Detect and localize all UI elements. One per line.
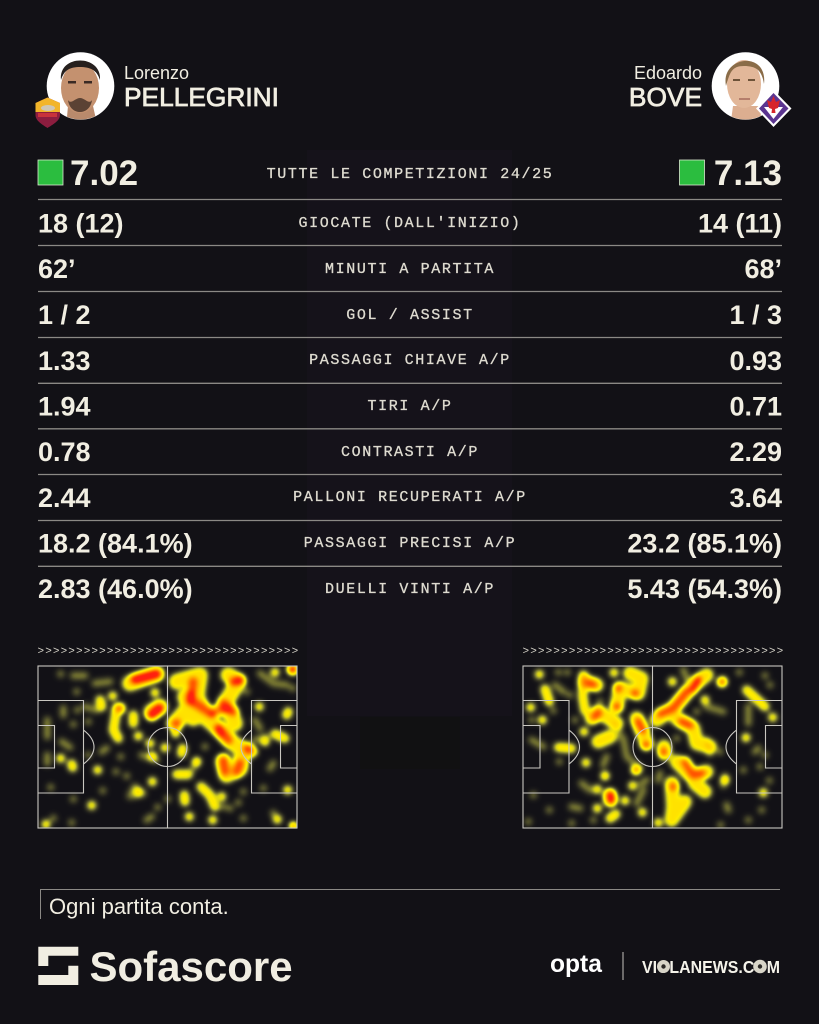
name: Lorenzo Pellegrini: PELLEGRINI [124, 82, 279, 112]
row: goals assists: 1 / 2 [38, 300, 91, 330]
icon: green rating square left [38, 160, 63, 185]
row: appearances: GIOCATE (DALL'INIZIO) [298, 215, 522, 232]
icon: Fiorentina crest [756, 90, 792, 127]
photo: Lorenzo Pellegrini [47, 52, 114, 128]
row: key passes: 0.93 [729, 346, 782, 376]
row: shots: 0.71 [729, 392, 782, 422]
row: accurate passes: 23.2 (85.1%) [627, 528, 782, 558]
row: minutes: MINUTI A PARTITA [325, 261, 495, 278]
row: appearances: 18 (12) [38, 208, 124, 238]
row: accurate passes: PASSAGGI PRECISI A/P [304, 535, 516, 552]
row: recoveries: 2.44 [38, 483, 91, 513]
row: goals assists: 1 / 3 [729, 300, 782, 330]
row: accurate passes: 18.2 (84.1%) [38, 528, 193, 558]
direction chevrons left: >>>>>>>>>>>>>>>>>>>>>>>>>>>>>>>>>> [38, 646, 299, 658]
logo: opta: opta [550, 951, 602, 978]
name: Edoardo Bove [629, 63, 702, 112]
row: minutes: 62’ [38, 254, 76, 284]
row: accurate passes [38, 528, 782, 558]
pitch lines left [38, 666, 297, 828]
caption [40, 890, 780, 919]
row: rating: 7.02 [70, 154, 138, 193]
icon: green rating square right [680, 160, 704, 185]
heatmap: Bove [522, 646, 784, 828]
player header: Pellegrini [36, 52, 279, 128]
row: shots: 1.94 [38, 392, 91, 422]
row: tackles: 0.78 [38, 437, 91, 467]
row: key passes: 1.33 [38, 346, 91, 376]
row: goals assists [38, 300, 782, 330]
pitch lines right [523, 666, 782, 828]
row: minutes: 68’ [744, 254, 782, 284]
direction chevrons right: >>>>>>>>>>>>>>>>>>>>>>>>>>>>>>>>>> [522, 646, 784, 658]
stats table [38, 154, 782, 604]
heat blobs left [38, 666, 297, 829]
player header: Bove [629, 52, 792, 128]
row: key passes [38, 346, 782, 376]
row: minutes [38, 254, 782, 284]
row: recoveries: 3.64 [729, 483, 782, 513]
icon: AS Roma crest [36, 98, 60, 128]
row: duels won [38, 574, 782, 604]
row: shots [38, 392, 782, 422]
row: tackles: CONTRASTI A/P [341, 444, 479, 461]
row: duels won: 2.83 (46.0%) [38, 574, 193, 604]
row: rating: TUTTE LE COMPETIZIONI 24/25 [267, 166, 553, 183]
row: duels won: 5.43 (54.3%) [627, 574, 782, 604]
caption: Ogni partita conta. [49, 894, 229, 919]
row: goals assists: GOL / ASSIST [346, 307, 474, 324]
row: recoveries [38, 483, 782, 513]
name: Edoardo Bove: Edoardo [634, 63, 702, 83]
row: shots: TIRI A/P [368, 398, 452, 415]
row: tackles [38, 437, 782, 467]
logo: Violanews: VIOLANEWS.COM [642, 957, 780, 977]
heatmap: Pellegrini [38, 646, 299, 828]
row: appearances [38, 208, 782, 238]
row: rating: 7.13 [714, 154, 782, 193]
row: rating [38, 154, 782, 193]
icon: Sofascore mark [38, 947, 78, 985]
photo: Edoardo Bove [712, 52, 779, 128]
row: key passes: PASSAGGI CHIAVE A/P [309, 352, 511, 369]
name: Edoardo Bove: BOVE [629, 82, 702, 112]
row: tackles: 2.29 [729, 437, 782, 467]
row: recoveries: PALLONI RECUPERATI A/P [293, 489, 527, 506]
logo: Sofascore: Sofascore [90, 943, 293, 990]
name: Lorenzo Pellegrini: Lorenzo [124, 63, 189, 83]
row: duels won: DUELLI VINTI A/P [325, 581, 495, 598]
row: appearances: 14 (11) [698, 208, 782, 238]
heat blobs right [524, 666, 781, 829]
name: Lorenzo Pellegrini [124, 63, 279, 112]
